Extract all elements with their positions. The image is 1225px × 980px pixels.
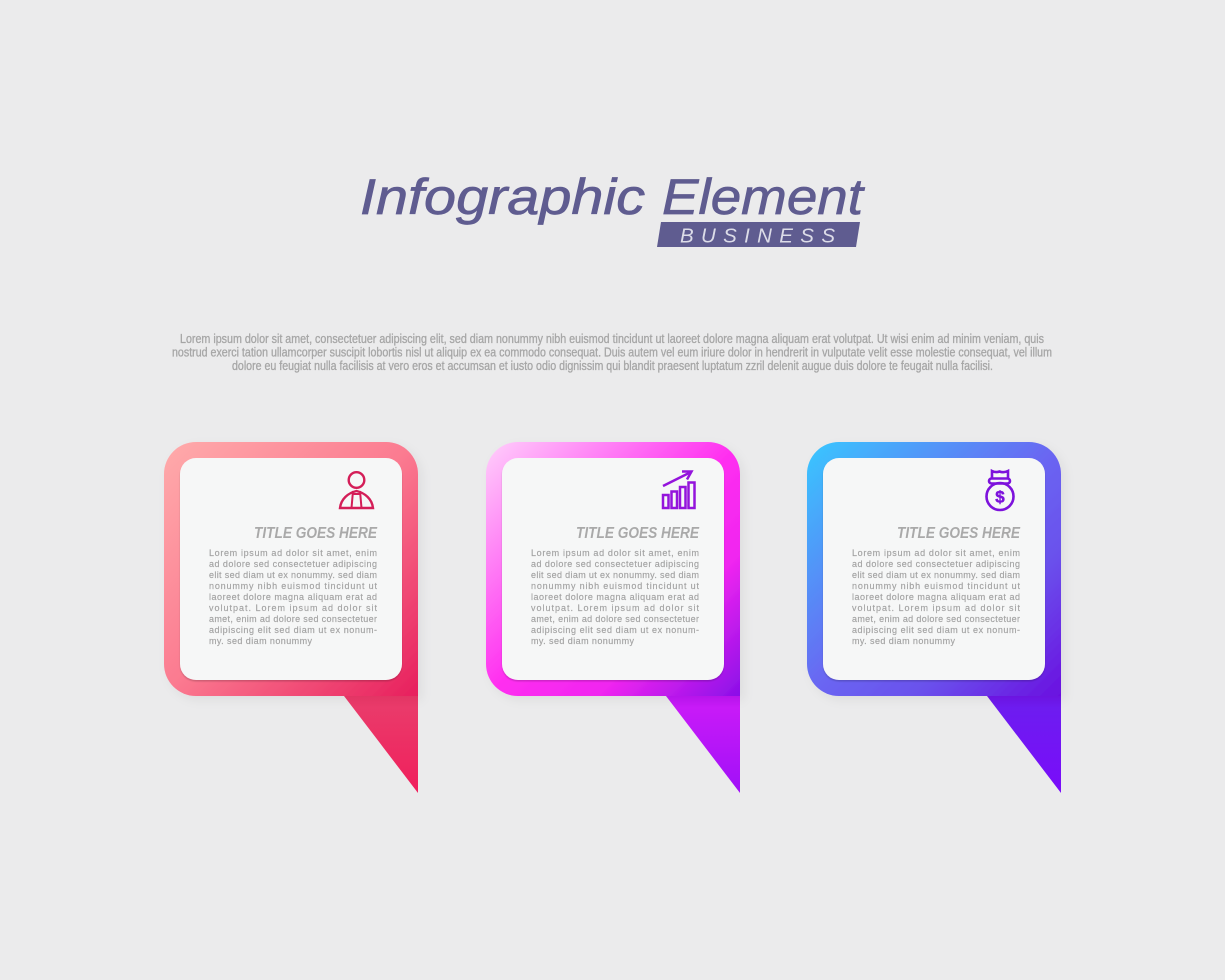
card 1 body text: adipiscing elit sed diam ut ex nonum- [209, 625, 377, 635]
card 2 body text: elit sed diam ut ex nonummy. sed diam [531, 570, 699, 580]
intro text: nostrud exerci tation ullamcorper suscipit lobortis nisl ut aliquip ex ea commodo consequat. Duis autem vel eum iriure dolor in hendrerit in vulputate velit esse molestie consequat, vel illum [172, 346, 1052, 360]
title: Infographic [360, 169, 645, 225]
card 1 body text: volutpat. Lorem ipsum ad dolor sit [209, 603, 377, 613]
card 3 body text: nonummy nibh euismod tincidunt ut [852, 581, 1020, 591]
icon: money bag: $ [995, 488, 1005, 506]
card 1 frame [164, 442, 418, 696]
card 2 body text: adipiscing elit sed diam ut ex nonum- [531, 625, 699, 635]
card 3 body text: my. sed diam nonummy [852, 636, 956, 646]
card 1 body text: Lorem ipsum ad dolor sit amet, enim [209, 548, 377, 558]
card 3 body text: volutpat. Lorem ipsum ad dolor sit [852, 603, 1020, 613]
card 1 heading: TITLE GOES HERE [254, 525, 378, 542]
card 1 body text: nonummy nibh euismod tincidunt ut [209, 581, 377, 591]
panel: card 1 [164, 442, 418, 793]
card 2 body text: laoreet dolore magna aliquam erat ad [531, 592, 699, 602]
card 3 body text: elit sed diam ut ex nonummy. sed diam [852, 570, 1020, 580]
title [360, 169, 865, 225]
card 1 body text [209, 548, 377, 646]
card 3 tail [987, 696, 1061, 793]
card 2 body text [531, 548, 699, 646]
subtitle banner: BUSINESS [680, 224, 835, 248]
card 2 body text: my. sed diam nonummy [531, 636, 634, 646]
intro text: dolore eu feugiat nulla facilisis at vero eros et accumsan et iusto odio dignissim qui blandit praesent luptatum zzril delenit augue duis dolore te feugait nulla facilisi. [232, 359, 993, 373]
card 1 body text: ad dolore sed consectetuer adipiscing [209, 559, 377, 569]
card 3 body text: amet, enim ad dolore sed consectetuer [852, 614, 1020, 624]
card 2 frame [486, 442, 740, 696]
card 2 body text: Lorem ipsum ad dolor sit amet, enim [531, 548, 699, 558]
card 2 body text: amet, enim ad dolore sed consectetuer [531, 614, 699, 624]
card 3 body text [852, 548, 1020, 646]
card 3 body text: Lorem ipsum ad dolor sit amet, enim [852, 548, 1020, 558]
panel: card 2 [486, 442, 740, 793]
card 3 body text: ad dolore sed consectetuer adipiscing [852, 559, 1020, 569]
card 1 inner panel [180, 458, 402, 680]
card 3 inner panel [823, 458, 1045, 680]
card 3 body text: laoreet dolore magna aliquam erat ad [852, 592, 1020, 602]
card 2 body text: volutpat. Lorem ipsum ad dolor sit [531, 603, 699, 613]
card 2 inner panel [502, 458, 724, 680]
subtitle banner [657, 222, 860, 248]
card 1 body text: amet, enim ad dolore sed consectetuer [209, 614, 377, 624]
icon: money bag [986, 471, 1014, 510]
card 3 body text: adipiscing elit sed diam ut ex nonum- [852, 625, 1020, 635]
card 1 body text: elit sed diam ut ex nonummy. sed diam [209, 570, 377, 580]
card 1 body text: laoreet dolore magna aliquam erat ad [209, 592, 377, 602]
card 2 body text: nonummy nibh euismod tincidunt ut [531, 581, 699, 591]
icon: growth chart [663, 472, 694, 508]
card 3 frame [807, 442, 1061, 696]
intro text: Lorem ipsum dolor sit amet, consectetuer adipiscing elit, sed diam nonummy nibh euismod tincidunt ut laoreet dolore magna aliquam erat volutpat. Ut wisi enim ad minim veniam, quis [180, 332, 1044, 346]
panel: card 3 [807, 442, 1061, 793]
icon: businessman [340, 472, 373, 508]
card 1 body text: my. sed diam nonummy [209, 636, 312, 646]
card 3 heading: TITLE GOES HERE [897, 525, 1021, 542]
card 2 heading: TITLE GOES HERE [576, 525, 700, 542]
card 1 tail [344, 696, 418, 793]
card 2 tail [666, 696, 740, 793]
card 2 body text: ad dolore sed consectetuer adipiscing [531, 559, 699, 569]
title: Element [662, 169, 865, 225]
intro text [172, 332, 1052, 373]
